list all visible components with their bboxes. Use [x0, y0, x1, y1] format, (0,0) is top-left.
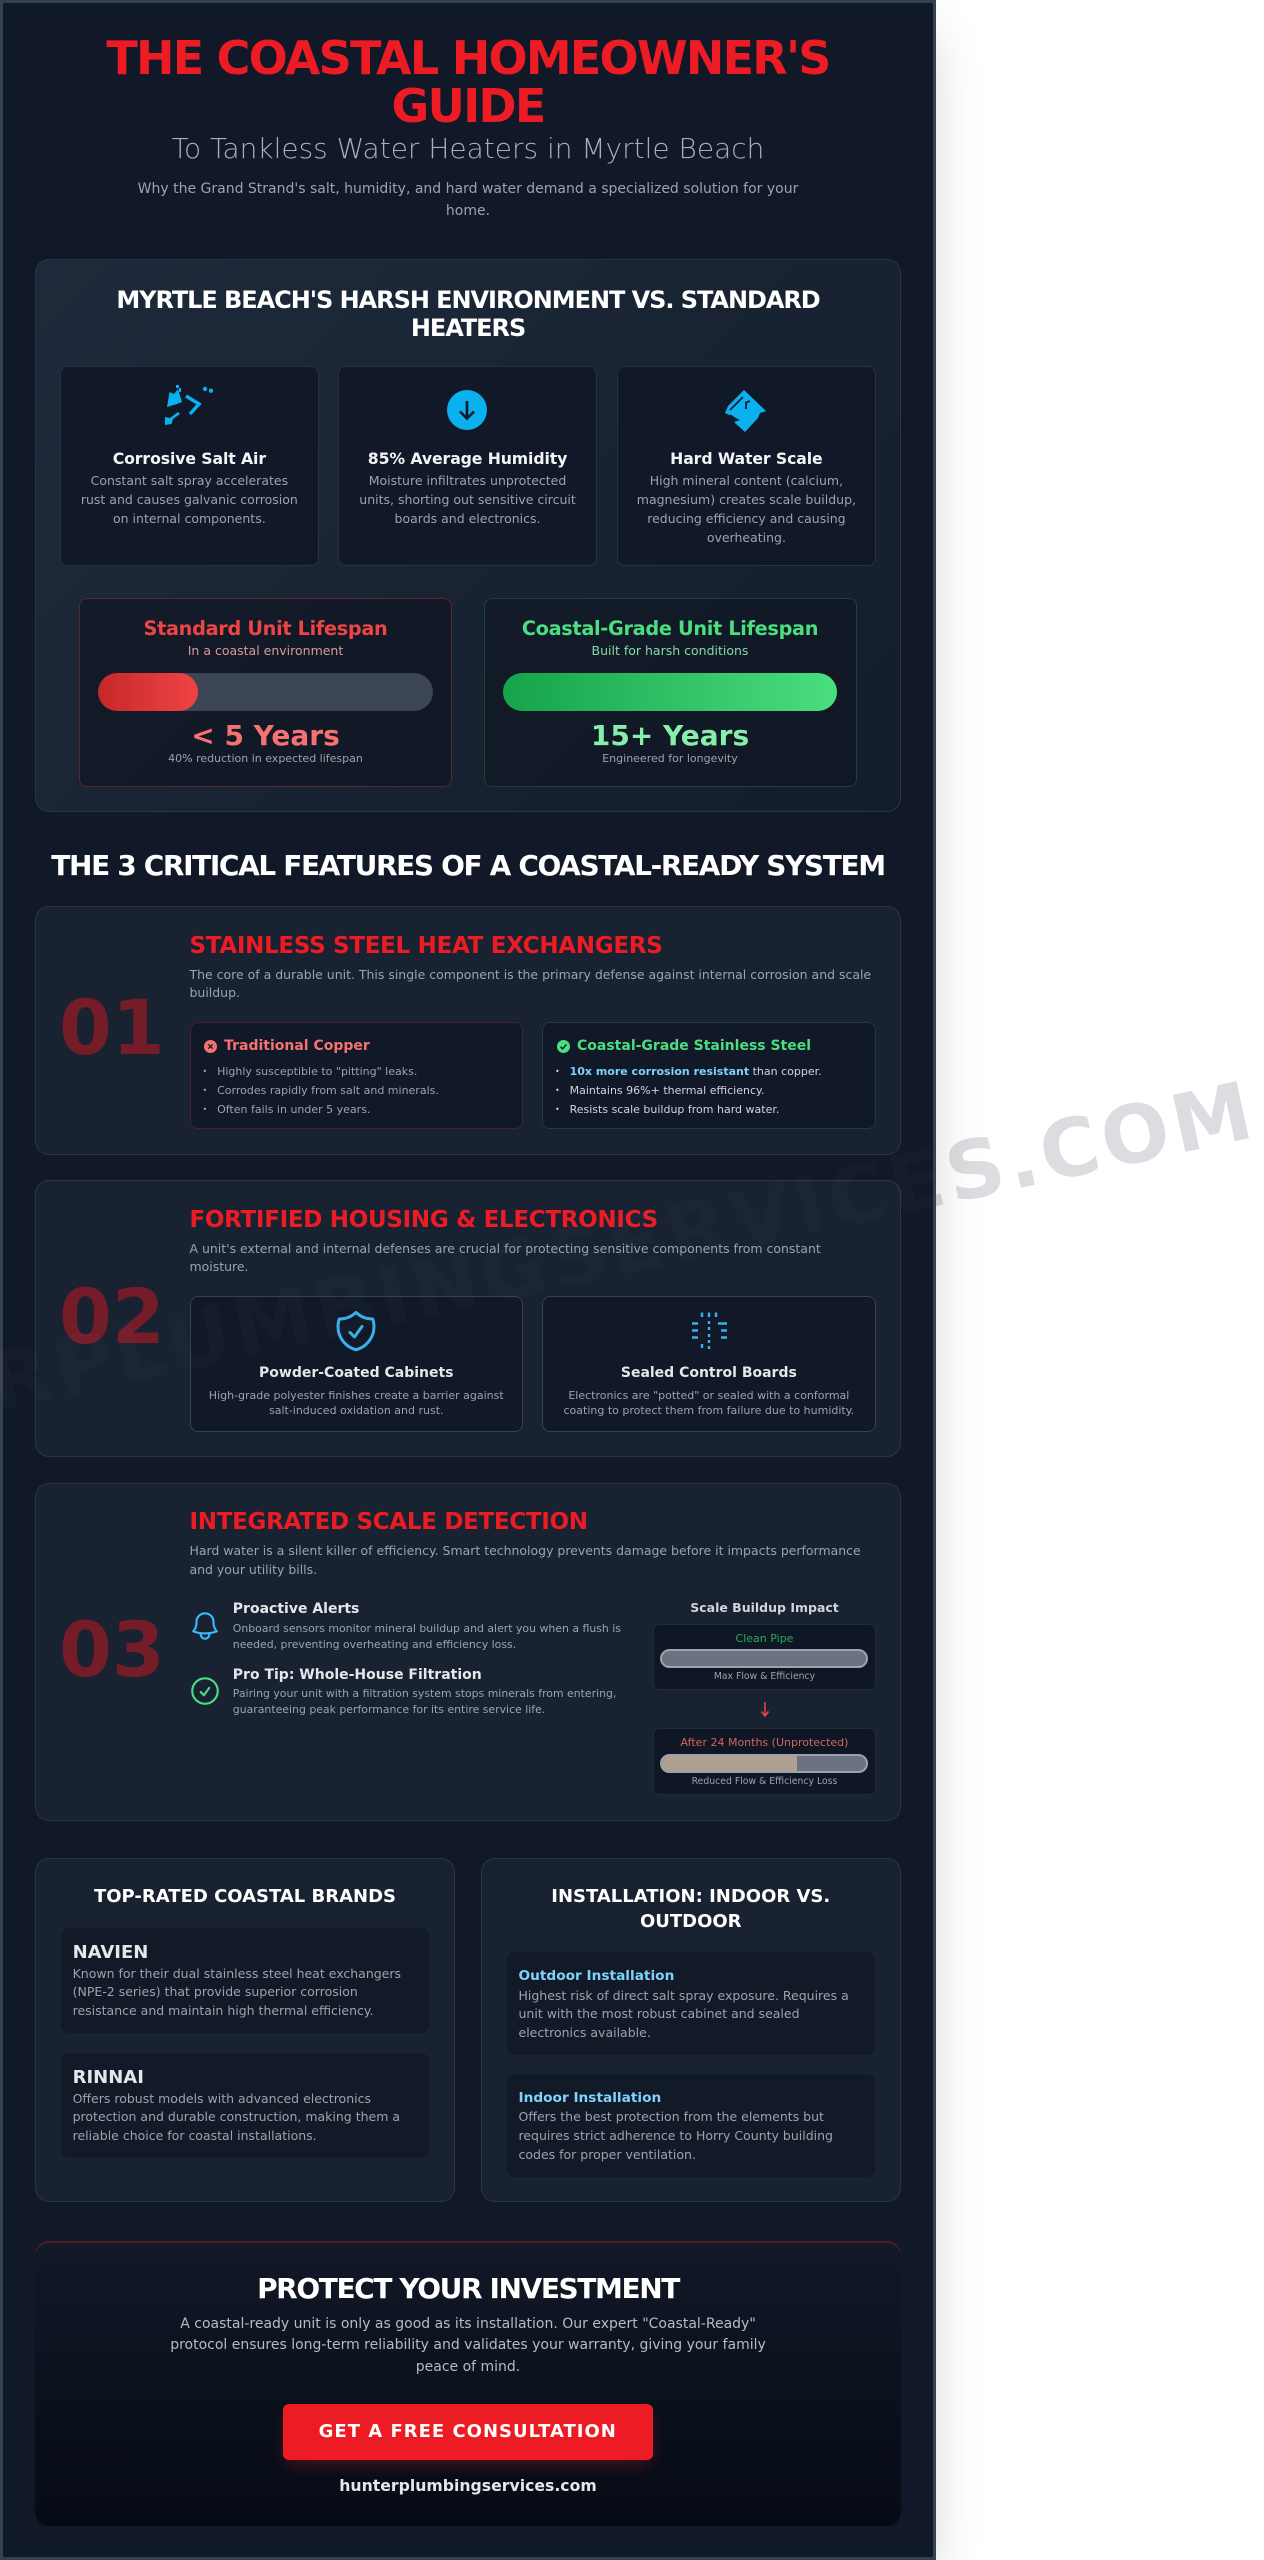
card: traditional copper	[190, 1022, 523, 1129]
option: outdoor	[506, 1952, 875, 2055]
intro text: Why the Grand Strand's salt, humidity, and hard water demand a specialized solution for your	[138, 181, 798, 197]
copper list: Often fails in under 5 years.	[217, 1103, 370, 1116]
card title: Sealed Control Boards	[621, 1365, 797, 1381]
brand description	[73, 2091, 400, 2143]
card: stainless steel	[542, 1022, 876, 1129]
feature description: Hard water is a silent killer of efficiency. Smart technology prevents damage before it impacts performance	[190, 1543, 861, 1558]
lifespan value: < 5 Years	[191, 719, 340, 752]
card: corrosive salt air	[60, 366, 319, 566]
feature description	[190, 1543, 861, 1577]
feature description	[189, 967, 871, 1000]
stainless title: Coastal-Grade Stainless Steel	[577, 1038, 811, 1054]
card description: High-grade polyester finishes create a barrier against	[209, 1389, 504, 1402]
card title: 85% Average Humidity	[368, 448, 567, 468]
label: After 24 Months (Unprotected)	[681, 1736, 848, 1749]
number: 03	[59, 1605, 165, 1694]
alert description: needed, preventing overheating and efficiency loss.	[233, 1638, 516, 1650]
stainless list: •	[555, 1086, 560, 1095]
feature description: buildup.	[190, 985, 240, 1000]
lifespan bar	[502, 673, 837, 711]
icon: circuit chip	[692, 1312, 727, 1349]
section heading: THE 3 CRITICAL FEATURES OF A COASTAL-READY SYSTEM	[51, 848, 885, 882]
feature title: FORTIFIED HOUSING & ELECTRONICS	[190, 1207, 658, 1233]
lifespan bar	[98, 673, 432, 711]
card title: Corrosive Salt Air	[113, 448, 266, 468]
icon: check circle	[557, 1040, 570, 1053]
card title: Hard Water Scale	[670, 448, 823, 468]
card title: Powder-Coated Cabinets	[259, 1365, 454, 1381]
option description	[518, 1988, 849, 2040]
brand description: protection and durable construction, making them a	[73, 2109, 400, 2124]
feature title: STAINLESS STEEL HEAT EXCHANGERS	[190, 933, 662, 959]
brand name: NAVIEN	[73, 1942, 148, 1963]
panel: feature 03	[35, 1483, 901, 1821]
feature description: A unit's external and internal defenses are crucial for protecting sensitive components from constant	[190, 1241, 821, 1256]
card description: Constant salt spray accelerates	[91, 473, 288, 488]
card description	[81, 473, 298, 526]
copper title: Traditional Copper	[224, 1038, 370, 1054]
icon: bell	[192, 1612, 218, 1640]
main infographic container	[0, 0, 936, 2560]
brand name: RINNAI	[73, 2067, 144, 2088]
brand: rinnai	[61, 2053, 429, 2158]
option title: Outdoor Installation	[518, 1968, 674, 1984]
card: coastal-grade lifespan	[484, 598, 856, 787]
feature description: The core of a durable unit. This single component is the primary defense against internal corrosion and scale	[190, 967, 871, 982]
copper list: Highly susceptible to "pitting" leaks.	[217, 1065, 417, 1078]
option description: requires strict adherence to Horry County building	[518, 2128, 833, 2143]
card description	[359, 473, 576, 526]
heading	[551, 1886, 830, 1932]
card description: salt-induced oxidation and rust.	[269, 1404, 444, 1417]
card description: reducing efficiency and causing	[647, 511, 846, 526]
lifespan subtitle: In a coastal environment	[188, 643, 343, 658]
scaled pipe box	[653, 1728, 876, 1795]
lifespan value: 15+ Years	[591, 719, 749, 752]
card: hard water	[617, 366, 876, 566]
alert description	[233, 1622, 621, 1650]
stainless list: 10x more corrosion resistant than copper.	[570, 1065, 822, 1078]
heading	[116, 286, 820, 342]
option description: unit with the most robust cabinet and sealed	[518, 2006, 800, 2021]
option description: Highest risk of direct salt spray exposure. Requires a	[518, 1988, 849, 2003]
feature title: INTEGRATED SCALE DETECTION	[190, 1509, 588, 1535]
panel: harsh environment	[35, 259, 901, 812]
option description: electronics available.	[518, 2025, 651, 2040]
card: sealed control boards	[542, 1296, 876, 1432]
number: 02	[59, 1272, 165, 1361]
caption: Max Flow & Efficiency	[714, 1671, 815, 1682]
panel: call to action	[35, 2241, 901, 2526]
icon: x circle	[204, 1040, 217, 1053]
card description: magnesium) creates scale buildup,	[637, 492, 856, 507]
card description: boards and electronics.	[395, 511, 541, 526]
card description: units, shorting out sensitive circuit	[359, 492, 576, 507]
lifespan subtitle: Built for harsh conditions	[592, 643, 748, 658]
title	[106, 31, 830, 133]
lifespan title: Standard Unit Lifespan	[144, 617, 387, 640]
option title: Indoor Installation	[518, 2090, 661, 2106]
card description	[637, 473, 856, 545]
title: THE COASTAL HOMEOWNER'S	[106, 31, 830, 85]
heading: OUTDOOR	[640, 1910, 742, 1932]
stainless list: •	[555, 1067, 560, 1076]
cta heading: PROTECT YOUR INVESTMENT	[257, 2272, 679, 2305]
brand description: (NPE-2 series) that provide superior corrosion	[73, 1984, 358, 1999]
intro text: home.	[446, 203, 490, 219]
lifespan note: 40% reduction in expected lifespan	[168, 752, 363, 765]
copper list	[202, 1065, 439, 1116]
number: 01	[59, 983, 165, 1072]
caption: Reduced Flow & Efficiency Loss	[692, 1776, 837, 1787]
brand description: resistance and maintain high thermal efficiency.	[73, 2003, 373, 2018]
panel: installation	[480, 1858, 901, 2202]
tip description: guaranteeing peak performance for its entire service life.	[233, 1703, 545, 1716]
panel: feature 02	[35, 1180, 901, 1457]
intro text	[138, 181, 798, 219]
copper list: •	[202, 1105, 207, 1114]
feature description	[190, 1241, 821, 1274]
pipe bar	[660, 1754, 868, 1773]
card description: Moisture infiltrates unprotected	[369, 473, 566, 488]
arrow	[761, 1702, 769, 1717]
pipe bar	[660, 1649, 868, 1668]
icon: humidity circle	[447, 390, 487, 430]
brand description	[73, 1966, 401, 2018]
brand description: Offers robust models with advanced electronics	[73, 2091, 371, 2106]
label: Clean Pipe	[736, 1632, 793, 1645]
feature description: and your utility bills.	[190, 1562, 317, 1577]
panel: coastal brands	[35, 1858, 455, 2202]
card description: on internal components.	[113, 511, 266, 526]
card description	[564, 1389, 854, 1417]
option description: codes for proper ventilation.	[518, 2147, 696, 2162]
card description: overheating.	[707, 530, 786, 545]
icon: check circle	[191, 1677, 219, 1705]
card description: High mineral content (calcium,	[650, 473, 843, 488]
cta button: GET A FREE CONSULTATION	[319, 2421, 617, 2442]
lifespan note: Engineered for longevity	[602, 752, 738, 765]
icon: shield check	[336, 1310, 376, 1352]
cta text	[170, 2316, 766, 2375]
stainless list: Resists scale buildup from hard water.	[570, 1103, 779, 1116]
option description: Offers the best protection from the elements but	[518, 2109, 824, 2124]
heading: MYRTLE BEACH'S HARSH ENVIRONMENT VS. STANDARD	[116, 286, 820, 314]
copper list: •	[202, 1067, 207, 1076]
stainless list: •	[555, 1105, 560, 1114]
cta text: A coastal-ready unit is only as good as its installation. Our expert "Coastal-Ready"	[180, 2316, 756, 2332]
subtitle: To Tankless Water Heaters in Myrtle Beach	[172, 132, 764, 165]
card: powder-coated cabinets	[190, 1296, 523, 1432]
icon: salt spray	[165, 385, 213, 425]
card description: coating to protect them from failure due to humidity.	[564, 1404, 854, 1417]
card description: Electronics are "potted" or sealed with a conformal	[568, 1389, 849, 1402]
brand description: Known for their dual stainless steel heat exchangers	[73, 1966, 401, 1981]
brand: navien	[61, 1928, 429, 2033]
icon: scale diamond	[725, 390, 766, 432]
tip description	[233, 1687, 616, 1716]
scale chart	[653, 1600, 876, 1795]
stainless list	[555, 1065, 822, 1116]
tip title: Pro Tip: Whole-House Filtration	[233, 1667, 482, 1683]
stainless list: Maintains 96%+ thermal efficiency.	[570, 1084, 764, 1097]
lifespan title: Coastal-Grade Unit Lifespan	[522, 617, 818, 640]
card description: rust and causes galvanic corrosion	[81, 492, 298, 507]
alert title: Proactive Alerts	[233, 1601, 359, 1617]
chart heading: Scale Buildup Impact	[690, 1600, 839, 1615]
feature description: moisture.	[190, 1259, 249, 1274]
card: standard unit lifespan	[79, 598, 452, 787]
brand description: reliable choice for coastal installations.	[73, 2128, 317, 2143]
cta button	[282, 2404, 653, 2460]
option: indoor	[506, 2074, 875, 2177]
clean pipe box	[653, 1624, 876, 1690]
card description	[209, 1389, 504, 1417]
copper list: •	[202, 1086, 207, 1095]
title: GUIDE	[391, 79, 545, 133]
heading: INSTALLATION: INDOOR VS.	[551, 1886, 830, 1906]
website: hunterplumbingservices.com	[339, 2476, 597, 2494]
tip description: Pairing your unit with a filtration system stops minerals from entering,	[233, 1687, 616, 1700]
cta text: protocol ensures long-term reliability and validates your warranty, giving your family	[170, 2337, 766, 2353]
cta text: peace of mind.	[416, 2359, 520, 2375]
heading: TOP-RATED COASTAL BRANDS	[94, 1886, 396, 1906]
card: humidity	[338, 366, 597, 566]
option description	[518, 2109, 833, 2162]
heading: HEATERS	[411, 314, 525, 342]
copper list: Corrodes rapidly from salt and minerals.	[217, 1084, 439, 1097]
alert description: Onboard sensors monitor mineral buildup and alert you when a flush is	[233, 1622, 621, 1635]
panel: feature 01	[35, 906, 901, 1155]
